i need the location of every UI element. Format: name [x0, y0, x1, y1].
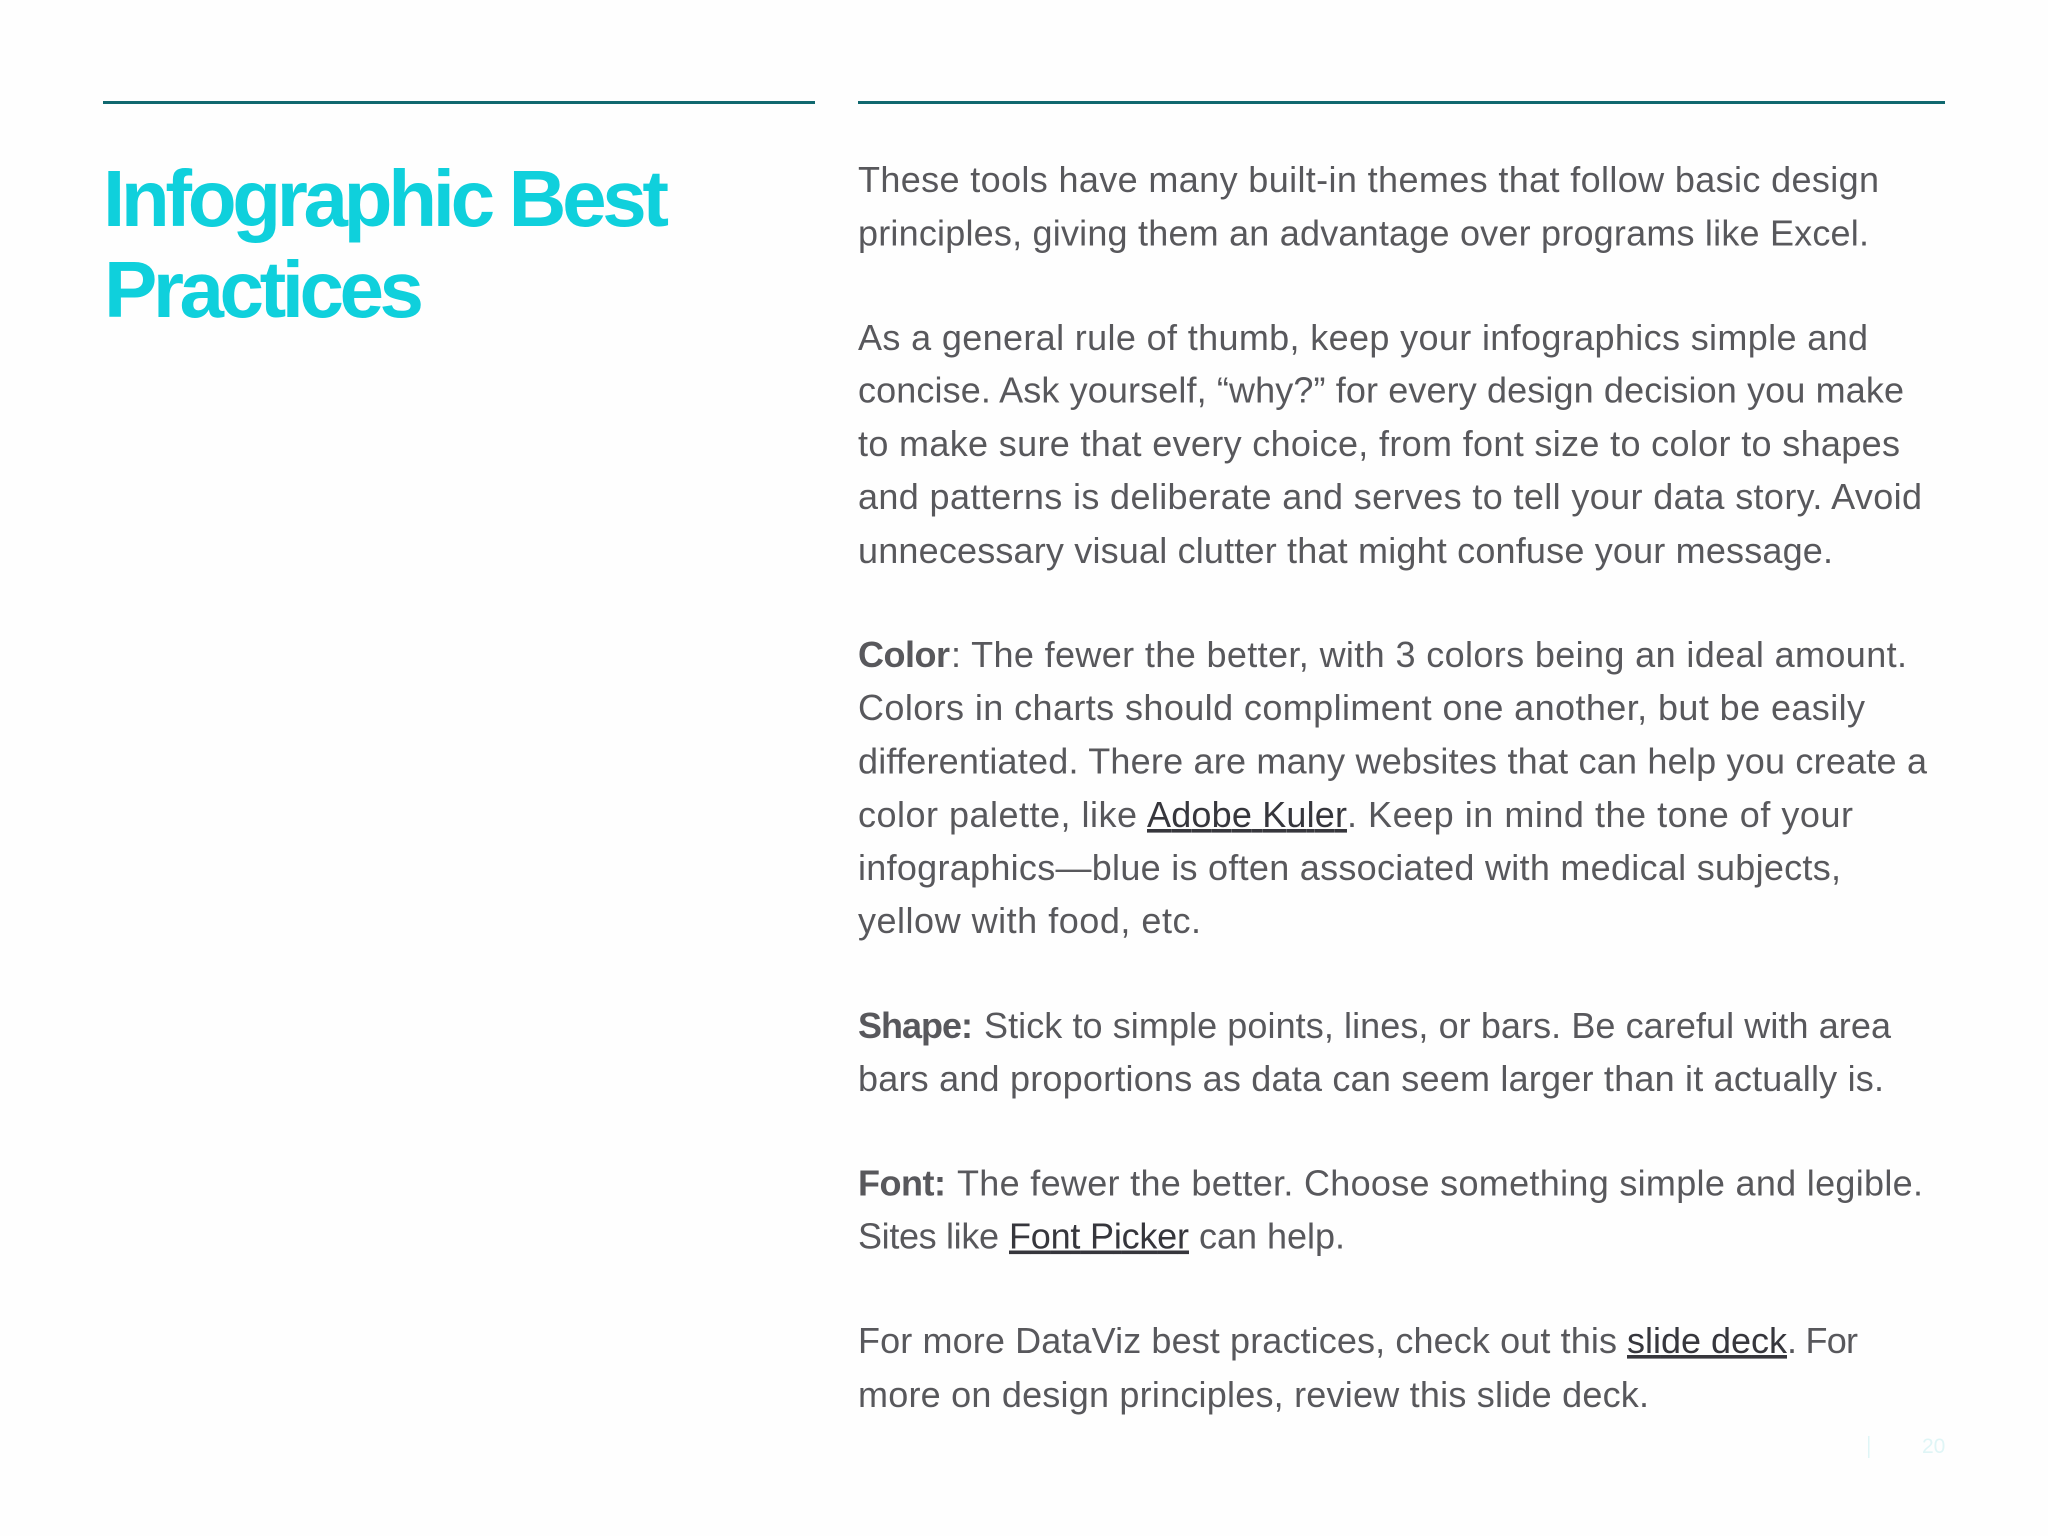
paragraph: color: Adobe Kuler — [1147, 794, 1347, 835]
paragraph: tools intro: These tools have many built-in themes that follow basic design — [858, 159, 1879, 200]
page number: 20 — [1922, 1435, 1945, 1458]
title: Infographic Best — [103, 154, 669, 243]
paragraph: more resources: more on design principles, review this slide deck. — [858, 1374, 1649, 1415]
paragraph: color: differentiated. There are many websites that can help you create a — [858, 740, 1928, 782]
paragraph: shape: bars and proportions as data can seem larger than it actually is. — [858, 1058, 1884, 1099]
paragraph: rule of thumb: to make sure that every choice, from font size to color to shapes — [858, 423, 1900, 464]
paragraph: font: can help. — [1199, 1216, 1345, 1256]
page number — [1868, 1435, 1945, 1458]
paragraph: color: Colors in charts should compliment one another, but be easily — [858, 687, 1865, 728]
paragraph: shape: Shape: — [858, 1005, 973, 1046]
paragraph: shape: Stick to simple points, lines, or bars. Be careful with area — [984, 1005, 1892, 1046]
paragraph: tools intro: principles, giving them an advantage over programs like Excel. — [858, 212, 1869, 254]
paragraph: rule of thumb: concise. Ask yourself, “why?” for every design decision you make — [858, 370, 1904, 410]
title: Practices — [104, 245, 424, 334]
paragraph: tools intro — [858, 159, 1879, 254]
paragraph: rule of thumb: As a general rule of thumb, keep your infographics simple and — [858, 317, 1868, 358]
paragraph: color: Color — [858, 634, 950, 675]
paragraph: rule of thumb: and patterns is deliberate and serves to tell your data story. Avoid — [858, 476, 1922, 517]
paragraph: font: The fewer the better. Choose something simple and legible. — [957, 1162, 1923, 1204]
paragraph: font — [858, 1162, 1923, 1256]
paragraph: more resources: For more DataViz best practices, check out this — [858, 1320, 1617, 1361]
paragraph: font: Sites like — [858, 1216, 999, 1256]
paragraph: more resources: . For — [1787, 1320, 1858, 1361]
title — [103, 154, 669, 334]
paragraph: color — [858, 634, 1928, 941]
paragraph: more resources — [858, 1320, 1858, 1415]
paragraph: font: Font: — [858, 1162, 946, 1204]
paragraph: color: : The fewer the better, with 3 colors being an ideal amount. — [951, 634, 1907, 675]
paragraph: shape — [858, 1005, 1892, 1099]
paragraph: rule of thumb: unnecessary visual clutter that might confuse your message. — [858, 530, 1833, 571]
paragraph: more resources: slide deck — [1627, 1320, 1788, 1361]
paragraph: color: infographics—blue is often associated with medical subjects, — [858, 847, 1841, 888]
text block: body copy — [858, 159, 1928, 1415]
paragraph: color: . Keep in mind the tone of your — [1347, 794, 1853, 835]
paragraph: color: color palette, like — [858, 794, 1137, 835]
paragraph: color: yellow with food, etc. — [858, 900, 1201, 941]
paragraph: font: Font Picker — [1009, 1216, 1189, 1256]
paragraph: rule of thumb — [858, 317, 1922, 571]
